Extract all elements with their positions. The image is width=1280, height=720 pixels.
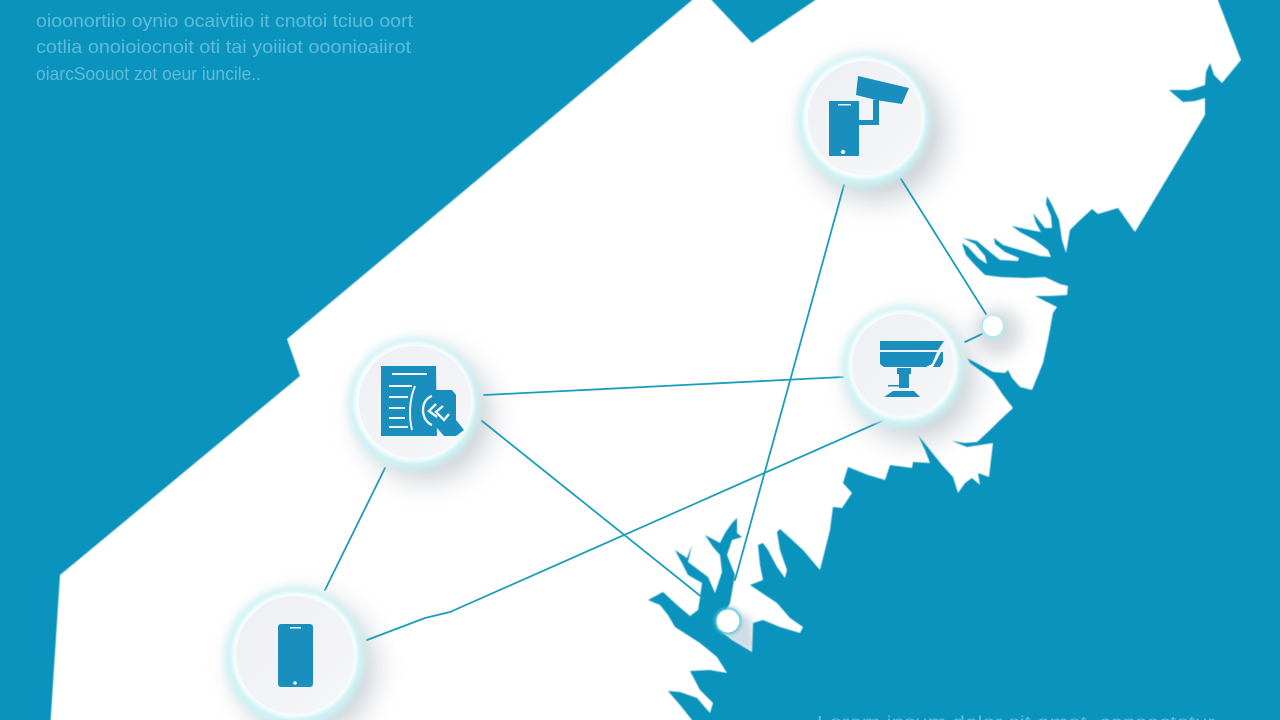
node shadows (238, 64, 1022, 720)
icon: security camera (880, 341, 944, 397)
icon: camera and phone (829, 76, 909, 156)
intro text block: oiarcSoouot zot oeur iuncile.. (36, 63, 261, 84)
node: security camera (842, 306, 964, 428)
intro text block: cotlia onoioiocnoit oti tai yoiiiot ooonioaiirot (36, 36, 411, 57)
node: smartphone (225, 587, 365, 720)
icon: smartphone (278, 624, 313, 687)
connector lines (325, 179, 986, 640)
node: document with shield (348, 338, 480, 470)
marker: northern endpoint (980, 314, 1006, 340)
node: camera and phone (797, 53, 931, 187)
icon: document and shield (381, 366, 464, 436)
marker: southern endpoint (714, 608, 742, 634)
intro text block: oioonortiio oynio ocaivtiio it cnotoi tciuo oort (36, 10, 413, 31)
intro text block (36, 10, 413, 84)
